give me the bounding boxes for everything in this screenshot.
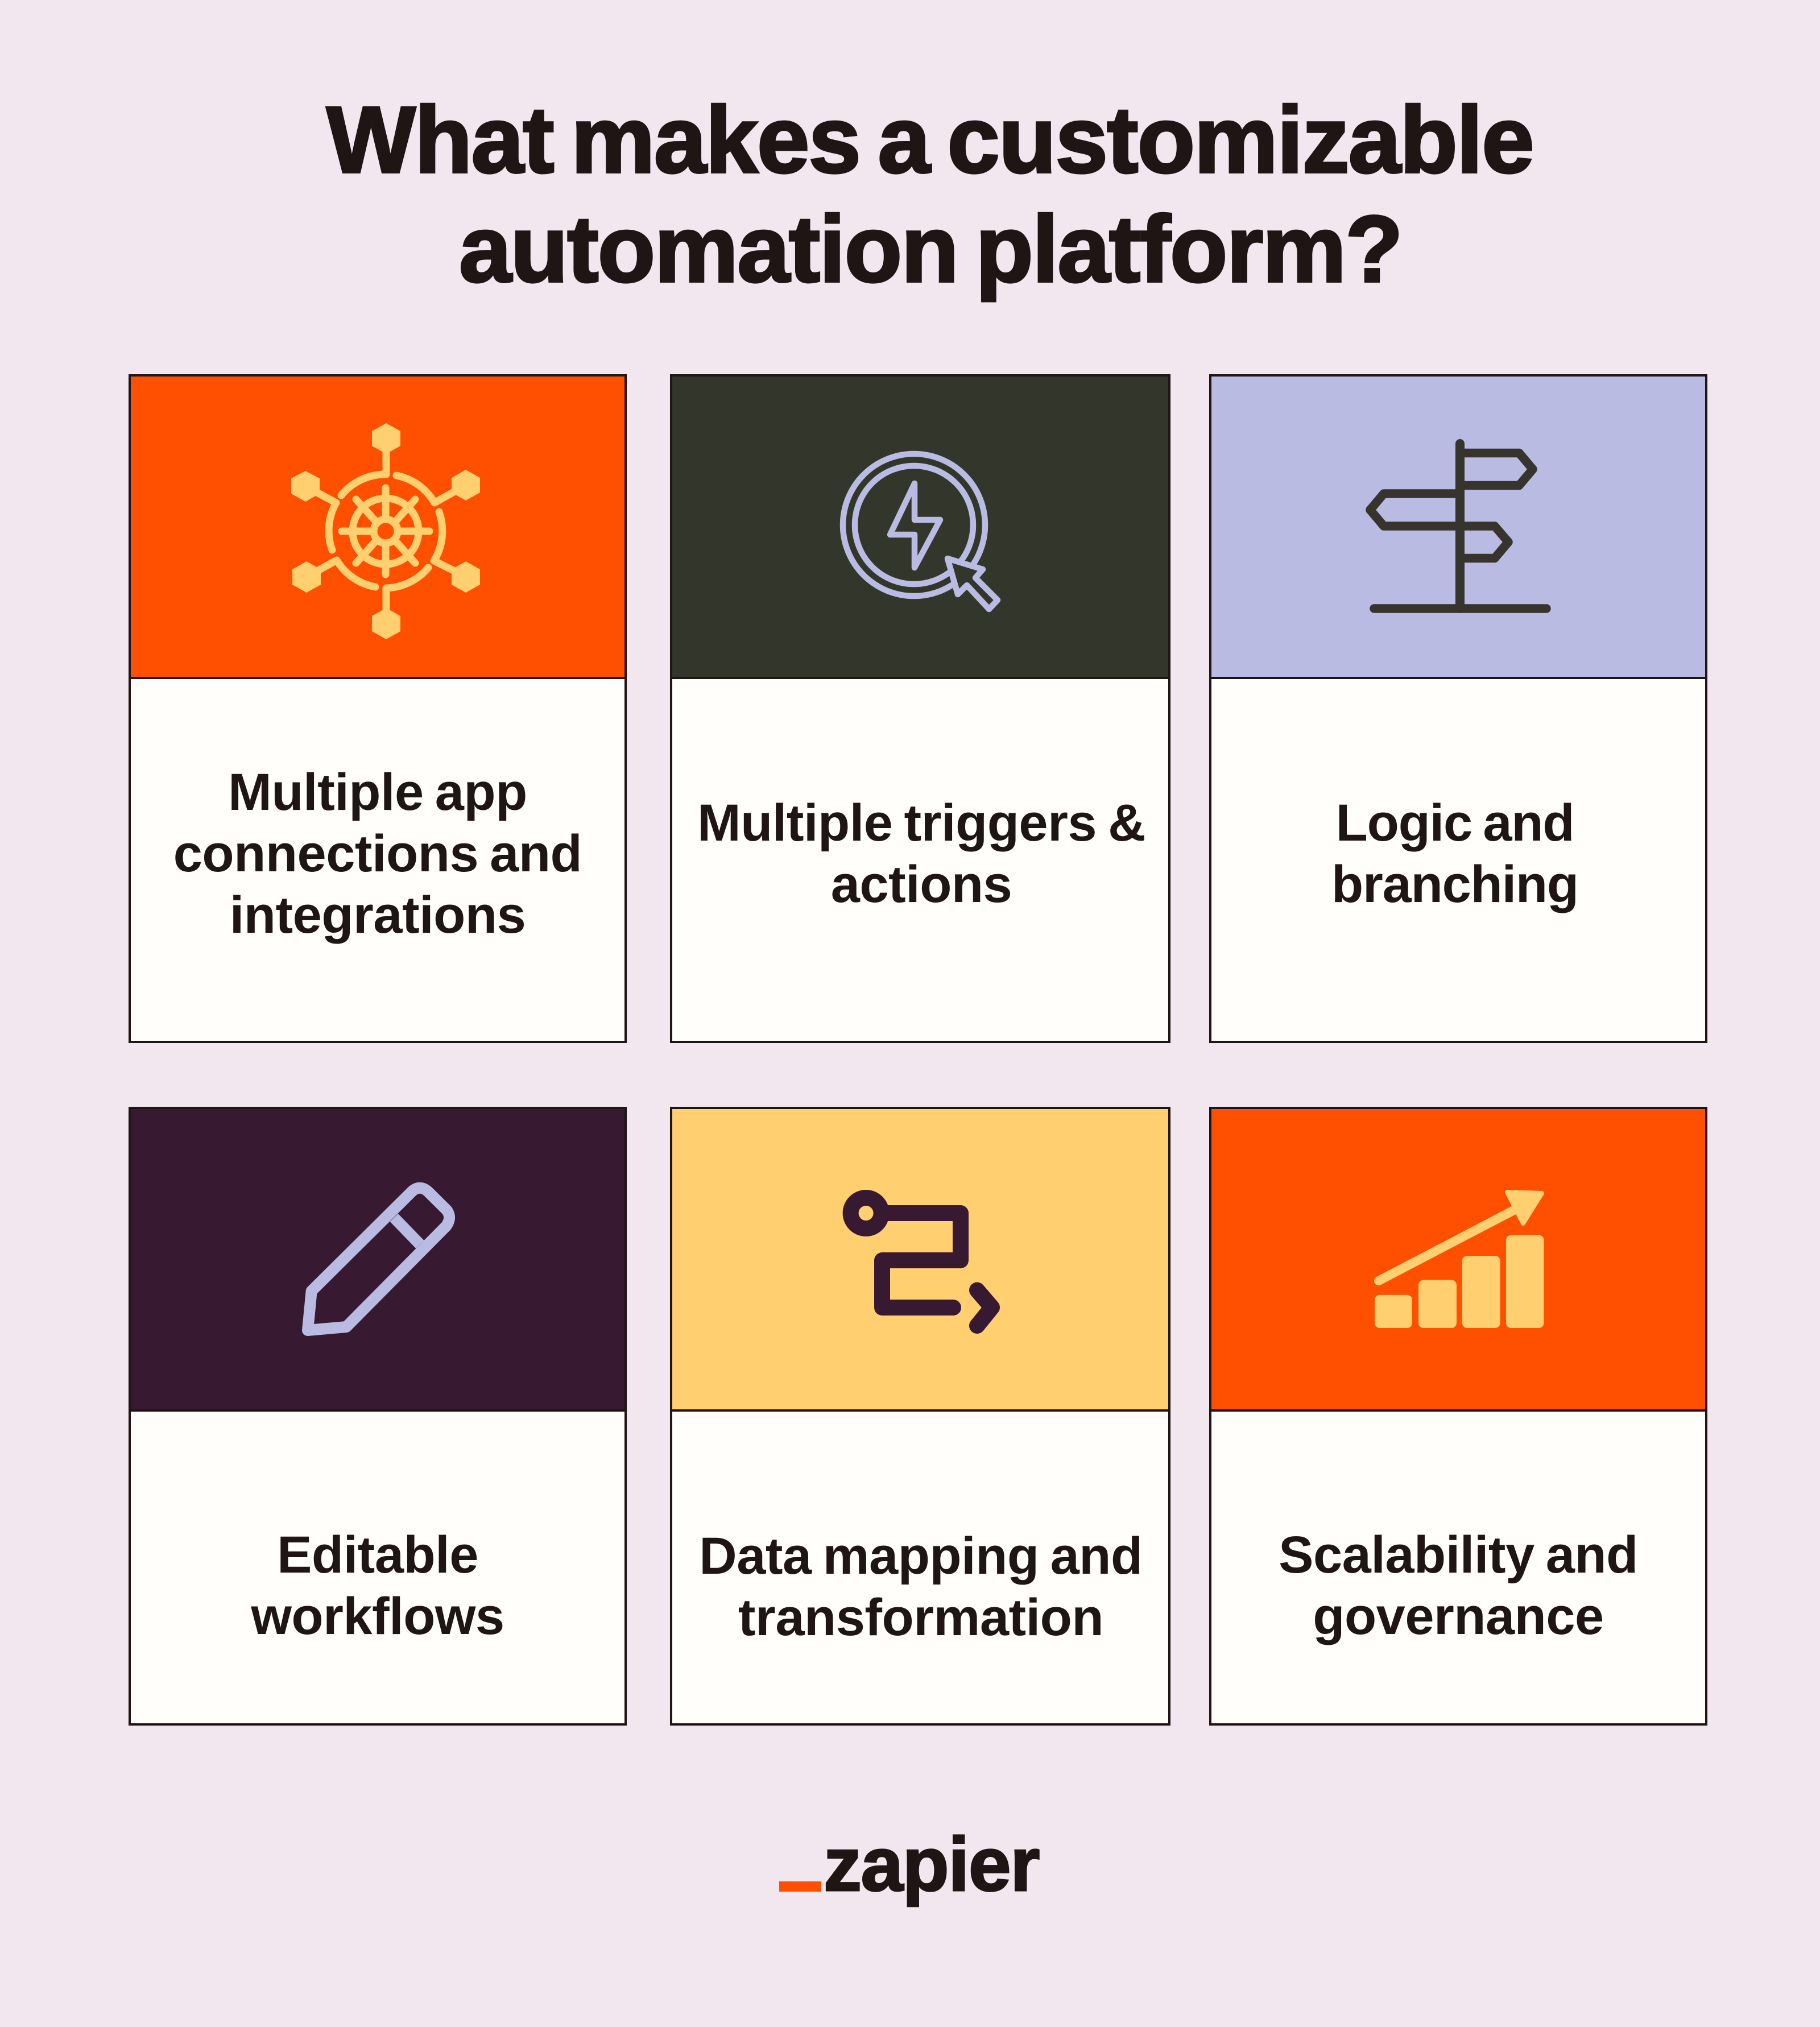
label: branching xyxy=(1331,855,1578,913)
icon panel: dark green xyxy=(672,377,1168,679)
label xyxy=(699,1527,1143,1647)
logo wordmark: zapier xyxy=(824,1822,1039,1907)
panel: data mapping and transformation xyxy=(670,1107,1170,1726)
label: transformation xyxy=(738,1588,1103,1647)
title: automation platform? xyxy=(459,197,1402,302)
icon panel: plum xyxy=(131,1109,624,1412)
icon: lightning circle with cursor xyxy=(839,450,1001,612)
icon: growth chart with arrow xyxy=(1374,1190,1544,1328)
icon: pencil xyxy=(302,1182,455,1336)
label xyxy=(1279,1526,1638,1645)
panel: scalability and governance xyxy=(1209,1107,1707,1726)
panel: editable workflows xyxy=(129,1107,627,1726)
title xyxy=(325,88,1533,303)
label: Multiple app xyxy=(228,763,527,821)
icon panel: orange xyxy=(1211,1109,1705,1412)
label: workflows xyxy=(251,1587,504,1645)
icon: routed path with chevron xyxy=(843,1190,1000,1334)
logo underscore xyxy=(779,1881,821,1892)
title: What makes a customizable xyxy=(326,88,1533,193)
label: Multiple triggers & xyxy=(697,794,1145,852)
label: integrations xyxy=(230,886,526,944)
label: governance xyxy=(1313,1587,1604,1645)
label: connections and xyxy=(173,825,582,883)
label: actions xyxy=(831,855,1012,913)
icon panel: lilac xyxy=(1211,377,1705,679)
icon panel: yellow xyxy=(672,1109,1168,1412)
label: Data mapping and xyxy=(699,1527,1143,1585)
label: Editable xyxy=(277,1526,478,1584)
panel: multiple app connections xyxy=(129,374,627,1043)
logo: zapier xyxy=(779,1822,1040,1908)
label: Logic and xyxy=(1336,794,1574,852)
label xyxy=(251,1526,504,1645)
label xyxy=(697,794,1145,913)
panel: multiple triggers and actions xyxy=(670,374,1170,1043)
icon: ship wheel network xyxy=(291,423,480,639)
icon: signpost xyxy=(1366,439,1551,613)
icon panel: orange xyxy=(131,377,624,679)
label xyxy=(173,763,582,944)
label xyxy=(1331,794,1578,913)
panel: logic and branching xyxy=(1209,374,1707,1043)
label: Scalability and xyxy=(1279,1526,1638,1584)
